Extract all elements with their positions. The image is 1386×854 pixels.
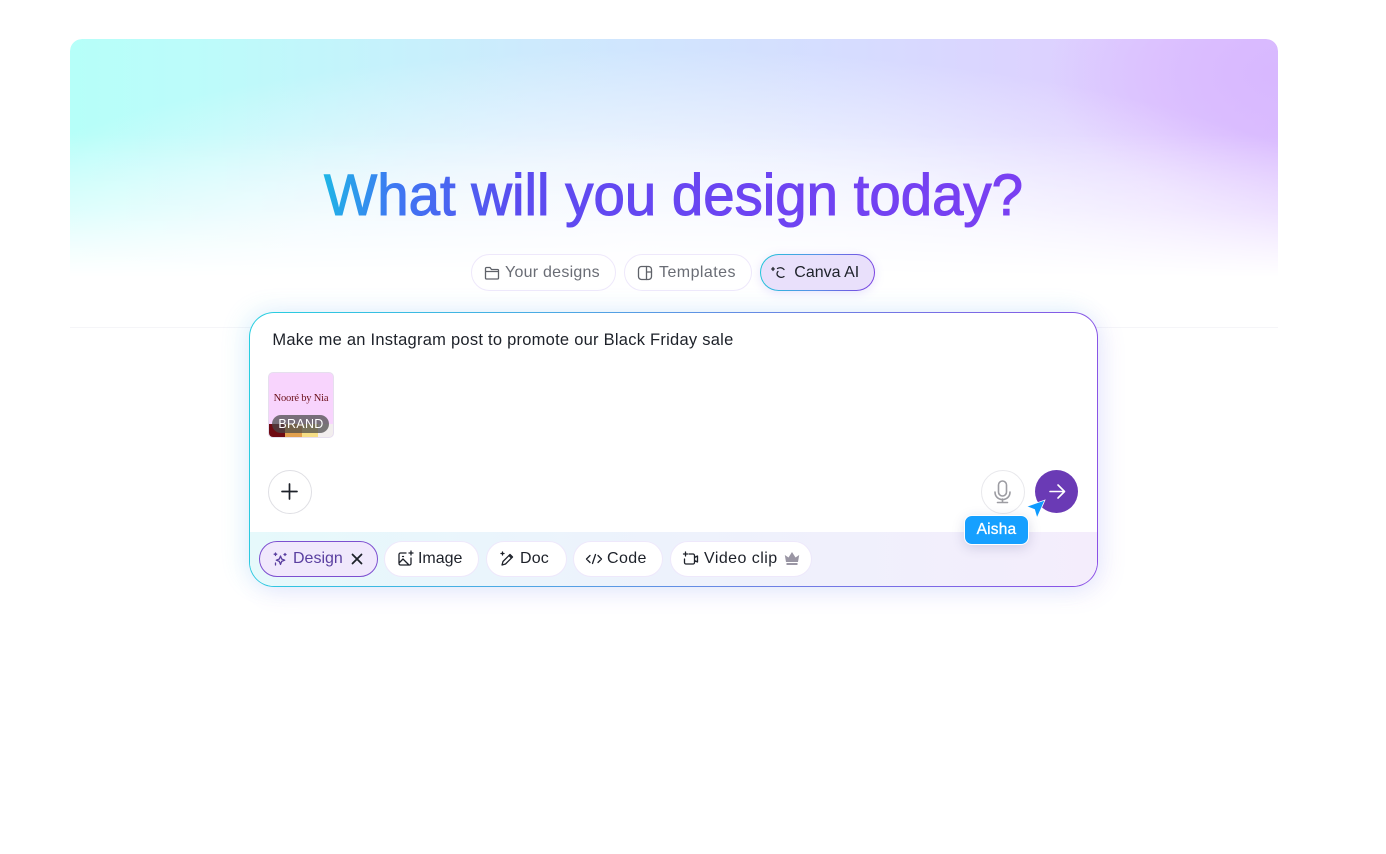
tab: your designs: Your designs bbox=[505, 264, 600, 281]
tab: templates: Templates bbox=[659, 264, 736, 281]
tab: canva ai active: Canva AI bbox=[794, 264, 859, 280]
send button bbox=[1035, 470, 1078, 513]
mode: doc: Doc bbox=[520, 550, 549, 567]
brand thumbnail bbox=[268, 372, 334, 438]
collaborator label bbox=[964, 515, 1029, 545]
prompt text: Make me an Instagram post to promote our Black Friday sale bbox=[272, 331, 734, 349]
brand badge: BRAND bbox=[278, 417, 324, 431]
tab: canva ai active bbox=[760, 254, 875, 291]
icon: crown bbox=[784, 552, 800, 565]
mode: image bbox=[384, 541, 479, 577]
brand name: Nooré by Nia bbox=[274, 393, 328, 404]
mode: design: Design bbox=[293, 550, 343, 567]
brand badge bbox=[272, 415, 329, 433]
mode: video clip: Video clip bbox=[704, 550, 778, 567]
colour swatches bbox=[269, 424, 333, 437]
title: What will you design today? bbox=[324, 163, 1023, 228]
bottom mode strip bbox=[250, 532, 1097, 587]
mode: video clip bbox=[670, 541, 812, 577]
hero gradient background bbox=[70, 39, 1278, 277]
microphone button bbox=[981, 470, 1025, 514]
collaborator cursor bbox=[1028, 499, 1046, 517]
mode: image: Image bbox=[418, 550, 462, 567]
mode: doc bbox=[486, 541, 567, 577]
faint divider bbox=[70, 327, 1278, 328]
collaborator label: Aisha bbox=[977, 521, 1016, 538]
add button bbox=[268, 470, 312, 514]
mode: design bbox=[259, 541, 378, 577]
tab: your designs bbox=[471, 254, 616, 291]
mode: code: Code bbox=[607, 550, 647, 567]
tab: templates bbox=[624, 254, 752, 291]
mode: code bbox=[573, 541, 663, 577]
prompt panel bbox=[249, 312, 1098, 587]
